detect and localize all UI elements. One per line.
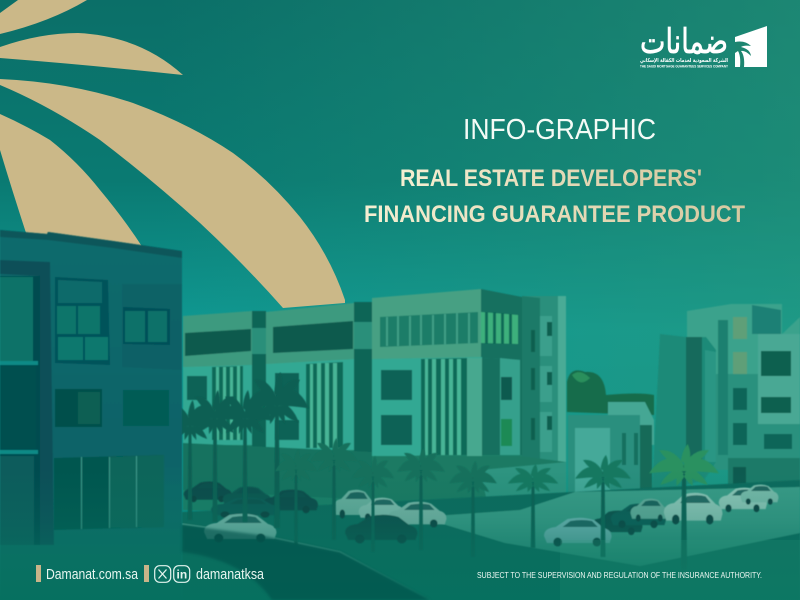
logo English tagline: THE SAUDI MORTGAGE GUARANTEES SERVICES COMPANY bbox=[640, 64, 728, 68]
small building and tree bbox=[567, 370, 654, 415]
logo emblem bbox=[735, 26, 767, 67]
wing 1 bbox=[183, 311, 252, 368]
subtitle: FINANCING GUARANTEE PRODUCT bbox=[364, 201, 745, 228]
subtitle bbox=[364, 165, 745, 228]
icon: X bbox=[155, 566, 171, 582]
dark column bbox=[252, 311, 266, 450]
palm trees bbox=[165, 372, 719, 570]
bottom fade overlay bbox=[0, 470, 800, 600]
regulatory disclaimer: SUBJECT TO THE SUPERVISION AND REGULATION OF THE INSURANCE AUTHORITY. bbox=[477, 571, 762, 580]
footer contact bar bbox=[36, 565, 265, 583]
icon: LinkedIn bbox=[174, 566, 190, 582]
dark column between wings bbox=[354, 302, 372, 460]
wing 3 front bbox=[372, 289, 481, 361]
wing 2 bbox=[266, 303, 354, 365]
parked cars bbox=[184, 482, 778, 546]
building: central complex bbox=[183, 289, 566, 520]
logo wordmark: ضمانات bbox=[640, 22, 728, 62]
tower right bbox=[522, 296, 566, 500]
palm leaf graphic bbox=[0, 0, 345, 308]
building: right complex bbox=[567, 304, 800, 500]
icon: LinkedIn: in bbox=[176, 568, 187, 582]
building: left foreground bbox=[0, 230, 182, 600]
ground and road bbox=[182, 480, 800, 600]
heading: INFO-GRAPHIC: INFO-GRAPHIC bbox=[463, 114, 656, 146]
ground floor right base bbox=[372, 456, 566, 510]
ground floor band bbox=[183, 440, 566, 520]
social handle: damanatksa bbox=[196, 566, 265, 583]
tower bbox=[687, 304, 800, 470]
logo Arabic tagline: الشركة السعودية لخدمات الكفالة الإسكاني bbox=[640, 57, 728, 64]
website: Damanat.com.sa bbox=[46, 566, 139, 583]
logo: Damanat bbox=[640, 22, 767, 68]
wing 3 side bbox=[481, 289, 522, 360]
subtitle: REAL ESTATE DEVELOPERS' bbox=[400, 165, 702, 192]
wedge bbox=[652, 334, 716, 494]
